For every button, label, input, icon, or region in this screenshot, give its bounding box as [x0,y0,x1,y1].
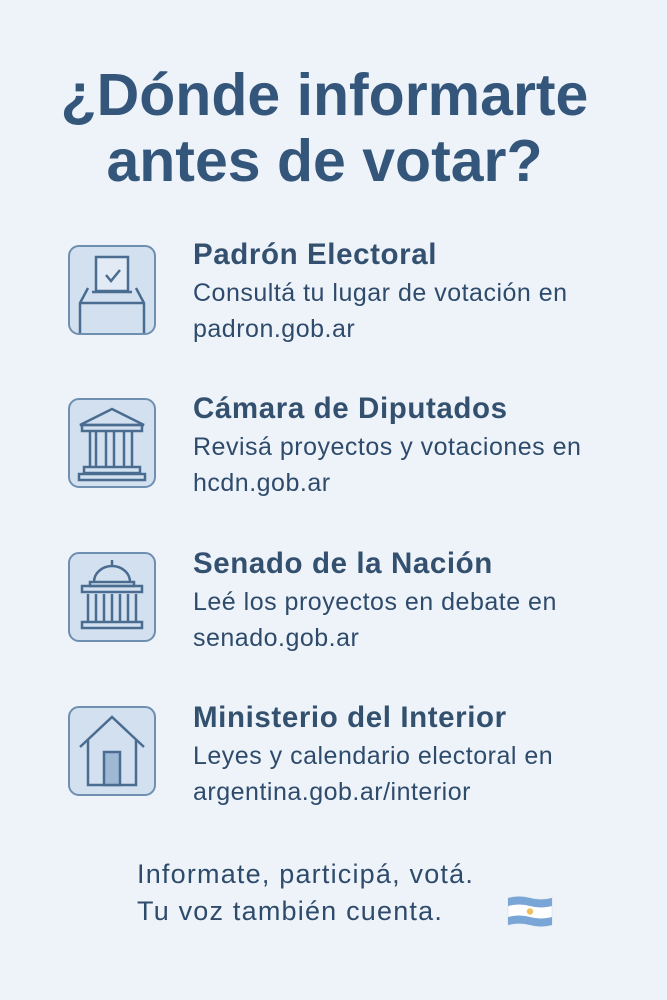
icon: argentina flag [508,896,552,927]
title [61,62,588,194]
icon: house [68,706,156,796]
icon: ballot box [68,245,156,335]
title: antes de votar? [106,128,543,194]
icon: capitol dome [68,552,156,642]
item: diputados [193,392,581,497]
item: ministerio: argentina.gob.ar/interior [193,778,471,806]
item: senado: Leé los proyectos en debate en [193,588,557,616]
icon: government building [68,398,156,488]
item: diputados: Revisá proyectos y votaciones en [193,433,581,461]
item: senado: senado.gob.ar [193,624,359,652]
item: padrón: Consultá tu lugar de votación en [193,279,568,307]
item: senado [193,547,557,652]
item: ministerio: Ministerio del Interior [193,701,507,734]
item: ministerio [193,701,553,806]
item: diputados: hcdn.gob.ar [193,469,331,497]
item: padrón: padron.gob.ar [193,315,355,343]
item: senado: Senado de la Nación [193,547,493,580]
footer text: Tu voz también cuenta. [137,896,443,926]
footer text [137,859,474,926]
footer text: Informate, participá, votá. [137,859,474,889]
item: padrón: Padrón Electoral [193,238,437,271]
item: diputados: Cámara de Diputados [193,392,508,425]
item: ministerio: Leyes y calendario electoral en [193,742,553,770]
title: ¿Dónde informarte [61,62,588,128]
item: padrón [193,238,568,343]
